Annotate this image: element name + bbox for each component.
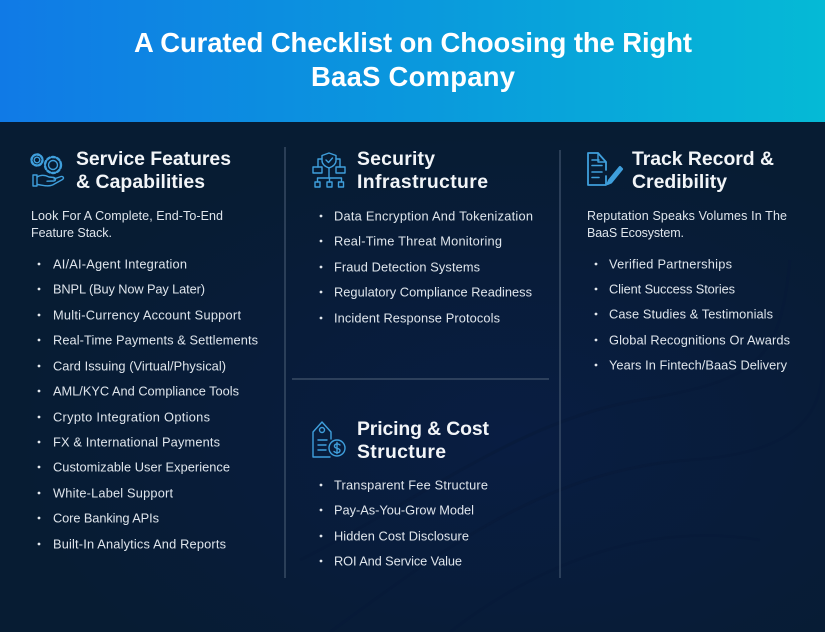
column divider left [284,147,286,578]
checklist: Real-Time Threat Monitoring [334,234,502,248]
checklist: Regulatory Compliance Readiness [334,284,532,300]
checklist: Pay-As-You-Grow Model [334,502,474,518]
intro text: Look For A Complete, End-To-End [31,209,223,223]
intro text [587,209,787,240]
heading: Pricing & Cost [357,418,490,440]
checklist: Years In Fintech/BaaS Delivery [609,358,788,372]
column divider right [559,150,561,578]
panel: service features [31,148,258,552]
checklist [38,256,258,552]
heading [632,148,774,193]
checklist: Global Recognitions Or Awards [609,332,790,348]
panel: track record and credibility [587,148,790,372]
checklist: White-Label Support [53,486,173,500]
heading: Security [357,148,435,170]
checklist: BNPL (Buy Now Pay Later) [53,282,205,296]
icon: document and pen [588,153,622,185]
checklist: Core Banking APIs [53,510,159,526]
heading: Infrastructure [357,171,488,193]
title: BaaS Company [311,61,516,92]
heading [76,148,231,193]
icon: shield network [313,153,345,187]
title: A Curated Checklist on Choosing the Right [134,27,692,58]
checklist: Real-Time Payments & Settlements [53,332,258,348]
checklist: Crypto Integration Options [53,410,210,424]
checklist: Fraud Detection Systems [334,260,480,274]
checklist: Verified Partnerships [609,256,732,272]
checklist: ROI And Service Value [334,554,462,568]
section divider [292,378,549,380]
checklist [320,208,533,326]
checklist: Client Success Stories [609,282,735,296]
heading: Service Features [76,148,231,170]
heading [357,418,490,463]
intro text: Reputation Speaks Volumes In The [587,209,787,223]
checklist: AML/KYC And Compliance Tools [53,384,239,398]
checklist [320,478,488,568]
checklist: Card Issuing (Virtual/Physical) [53,358,226,374]
panel: security infrastructure [313,148,533,326]
checklist [595,256,790,372]
heading: Credibility [632,171,727,193]
checklist: FX & International Payments [53,434,220,450]
checklist: Customizable User Experience [53,460,230,474]
heading [357,148,488,193]
panel: pricing and cost structure [313,418,490,568]
checklist: AI/AI-Agent Integration [53,256,187,272]
checklist: Transparent Fee Structure [334,478,488,492]
title [134,27,692,92]
heading: Track Record & [632,148,774,170]
checklist: Data Encryption And Tokenization [334,208,533,224]
heading: & Capabilities [76,171,205,193]
icon: price tag with dollar coin [313,422,345,457]
icon: gears and hand [32,154,63,186]
intro text [31,209,223,240]
intro text: Feature Stack. [31,226,112,240]
checklist: Built-In Analytics And Reports [53,536,226,552]
checklist: Case Studies & Testimonials [609,306,773,322]
header banner [0,0,825,122]
checklist: Incident Response Protocols [334,310,500,326]
checklist: Hidden Cost Disclosure [334,528,469,544]
checklist: Multi-Currency Account Support [53,308,241,322]
intro text: BaaS Ecosystem. [587,226,684,240]
heading: Structure [357,441,446,463]
